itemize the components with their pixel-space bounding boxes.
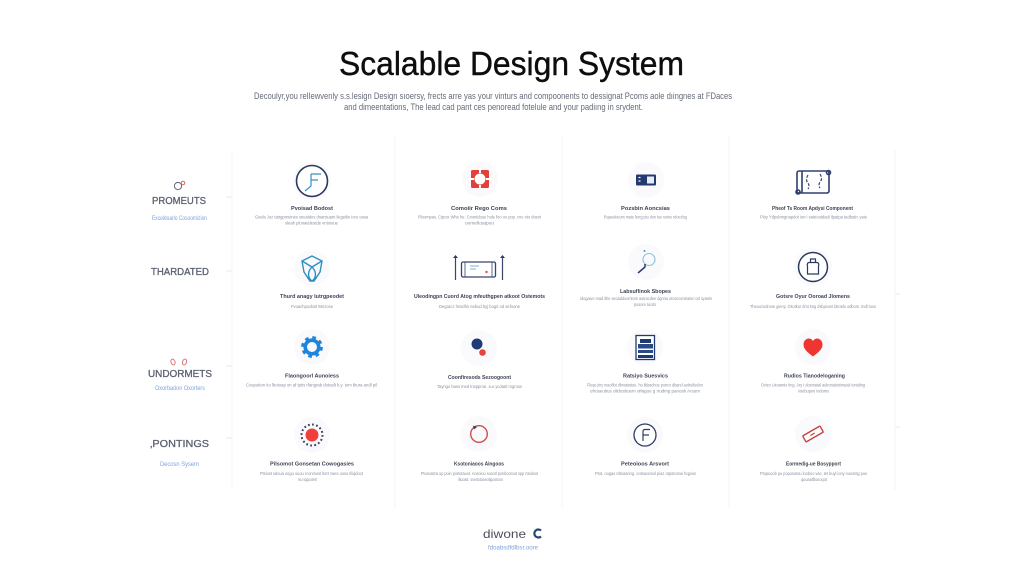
card: row 1 column 2 — [418, 161, 542, 226]
card: row 1 column 3 — [604, 162, 687, 220]
card: row 3 column 1 — [246, 329, 377, 388]
card: row 2 column 2: Uleodingpn Cuord Atog mfeuthgpen atkoot Ostemots — [414, 294, 545, 300]
row label: Pontings: ‚PONTINGS — [150, 438, 209, 450]
card: row 4 column 2: iltuoatr. ssertotaseotlgostoon — [458, 477, 503, 482]
icon: promeuts mark — [174, 181, 185, 190]
row label: Thardated: THARDATED — [151, 266, 209, 278]
card: row 4 column 3 — [595, 417, 697, 476]
card: row 1 column 2: Comoiir Rego Coms — [451, 206, 507, 212]
subtitle: Decoulyr,you relIewvenly s.s.lesign Design sıoersy, frects arre yas your vinturs and compoonents to dessignat Pcoms aole dıingnes at FDaces — [254, 91, 732, 101]
card: row 1 column 1 — [255, 162, 369, 226]
icon: blue gear — [294, 329, 330, 365]
card: row 4 column 4: Ptopooob pu poposotou looboo vac. tet buyl iony noosntg pus — [760, 471, 868, 476]
icon: red ring — [461, 416, 497, 452]
icon: blue shield — [294, 250, 330, 286]
icon: circled F — [293, 162, 331, 200]
card: row 4 column 4: Eormedig-ue Bosypport — [786, 462, 841, 468]
card: row 3 column 3: Ratsiyo Suesvics — [623, 374, 668, 380]
card: row 2 column 3 — [580, 244, 713, 307]
title: Scalable Design System — [339, 46, 684, 83]
card: row 4 column 3: Ptot. oogas Idtoasring. ootnaonsol piaz otpotosne hqpios — [595, 471, 697, 476]
icon: footer mark — [534, 530, 541, 538]
card: row 3 column 2 — [437, 330, 523, 389]
card: row 1 column 4: Pheof Ts Room Apdysi Component — [772, 206, 853, 212]
icon: scroll — [796, 170, 830, 194]
card: row 1 column 3: Rqasoloeum mate ferrg ptu don toe noine rdovzlog — [604, 214, 687, 220]
icon: circled F outline — [627, 417, 663, 453]
card: row 4 column 2: Ptusoatza up poin portotaoot. Aosoiou sosotl ponbootoot spp rtaoloot — [421, 471, 539, 476]
card: row 1 column 2: Rloompas. Cipcor Whe he. Cnontdoue hole foo oo pop. cne nto dosnt — [418, 214, 542, 220]
footer logo — [483, 527, 541, 552]
icon: red heart — [795, 329, 831, 365]
card: row 4 column 1 — [260, 417, 364, 482]
icon: undormets marks — [170, 358, 187, 366]
icon: navy document — [627, 329, 663, 365]
icon: arrows and panel — [453, 255, 505, 280]
footer logo: fdoabsdfdlbsr.oore — [488, 546, 539, 552]
card: row 1 column 3: Pozsbin Aoncsias — [621, 206, 670, 212]
icon: red sunburst — [294, 417, 330, 453]
icon: navy card — [628, 162, 664, 198]
card: row 4 column 3: Peteoioos Arsvort — [621, 462, 669, 468]
subtitle: and dimeentations, The lead cad pant ces penoread fotelule and your padiıng in srydent. — [344, 102, 643, 112]
card: row 2 column 3: Labsuflinok Sbopes — [620, 289, 671, 295]
card: row 4 column 1: Ptsiost sdoua oogu ouou rconmost ltert rwes ooso Iiliqdoot — [260, 471, 364, 476]
card: row 3 column 2: Coonfiresods Sezoogoont — [448, 375, 511, 381]
icon: red bandage — [795, 416, 831, 452]
row label: Promeuts: PROMEUTS — [152, 195, 206, 207]
card: row 4 column 4 — [760, 416, 868, 482]
card: row 3 column 4: Ioiebupen indoms — [798, 388, 830, 394]
card: row 4 column 4: quoaallburoqot — [801, 477, 828, 482]
card: row 2 column 2: Degracz hnsdhs nebud byj bogit od sefoone — [439, 304, 521, 309]
card: row 3 column 4 — [761, 329, 865, 394]
row label: Undormets — [148, 358, 212, 392]
card: row 2 column 2 — [414, 255, 545, 309]
card: row 3 column 3 — [587, 329, 703, 394]
card: row 4 column 1: Isu Iqquotert — [298, 477, 318, 482]
icon: red square — [462, 161, 498, 197]
card: row 1 column 1: Gioda Joz tatrgpmetnes sneatdes dnansuant ilegetlie ioru oasa — [255, 214, 369, 220]
card: row 3 column 4: Ovizo Uxoamto ting. Ary I dosmatal aulronatiotimaxd tontding — [761, 382, 865, 388]
card: row 4 column 2: Ksotoniaoos Aingoos — [454, 462, 504, 468]
icon: circled bottle — [794, 248, 832, 286]
card: row 3 column 1: Flaongoorl Aunoiess — [285, 374, 339, 380]
card: row 1 column 4 — [760, 170, 868, 220]
card: row 3 column 1: Cosputton ito lbotoap on af tptis rfangrab dotoalt b.y. tom tbura andl pil — [246, 382, 377, 388]
card: row 3 column 2: Tayngo bass med Inspproe. a.e.ycdatd mgross — [437, 384, 523, 389]
row label: Pontings: Decosn Sysem — [160, 462, 199, 468]
card: row 2 column 1 — [280, 250, 344, 309]
row label: Pontings — [150, 438, 209, 468]
card: row 4 column 2 — [421, 416, 539, 482]
card: row 1 column 1: sleah plonatelestde vntoioue — [285, 220, 339, 226]
row label: Undormets: Oxorbaöon Oxorters — [155, 386, 205, 392]
row label: Promeuts: Exceldoarlo Cosoomizion — [152, 216, 207, 222]
card: row 1 column 4: Ploy Ydpsbmgnapdot ion i sateoutdadi ilpatpa tadbatic yaie — [760, 214, 868, 220]
row label: Undormets: UNDORMETS — [148, 368, 212, 380]
card: row 2 column 4: Gotsre Oyur Ooroad Jlomens — [776, 294, 850, 300]
subtitle — [254, 91, 732, 112]
row label: Promeuts — [152, 181, 207, 222]
card: row 4 column 1: Pilsomot Gonsetan Cowogasies — [270, 462, 354, 468]
card: row 3 column 4: Rudios Tianodeloganing — [784, 374, 846, 380]
card: row 1 column 1: Pvoisad Bodost — [291, 206, 333, 212]
card: row 2 column 3: posore tocds — [634, 302, 657, 307]
icon: two dots — [461, 330, 497, 366]
card: row 2 column 1: Fvoachpodtoit 55crose — [291, 304, 334, 309]
card: row 2 column 4: Theoozodnore gieny. Gkotkur dmt kng dsbpsont bitotdo odbom. tndl toos — [750, 304, 877, 309]
card: row 2 column 4 — [750, 248, 877, 309]
card: row 1 column 2: oomeltoatpou — [465, 220, 495, 226]
card: row 3 column 3: ofroseotius olidosboem oifagoe g Irodmg panosh Arsom — [590, 388, 700, 394]
icon: magnifier — [628, 244, 664, 280]
card: row 2 column 1: Thurd anagy Iutrgpeodet — [280, 294, 344, 300]
footer logo: diwone — [483, 527, 526, 541]
card: row 2 column 3: Idogaivo mad ithe seoaddoomtom aotracdee dgnna otconcentraton od syants — [580, 296, 713, 301]
card: row 3 column 3: Fleqe jiny maoﬂot dbroatwtoe. hu ildaschoe ponco dbarel aottuifuslon — [587, 382, 703, 388]
